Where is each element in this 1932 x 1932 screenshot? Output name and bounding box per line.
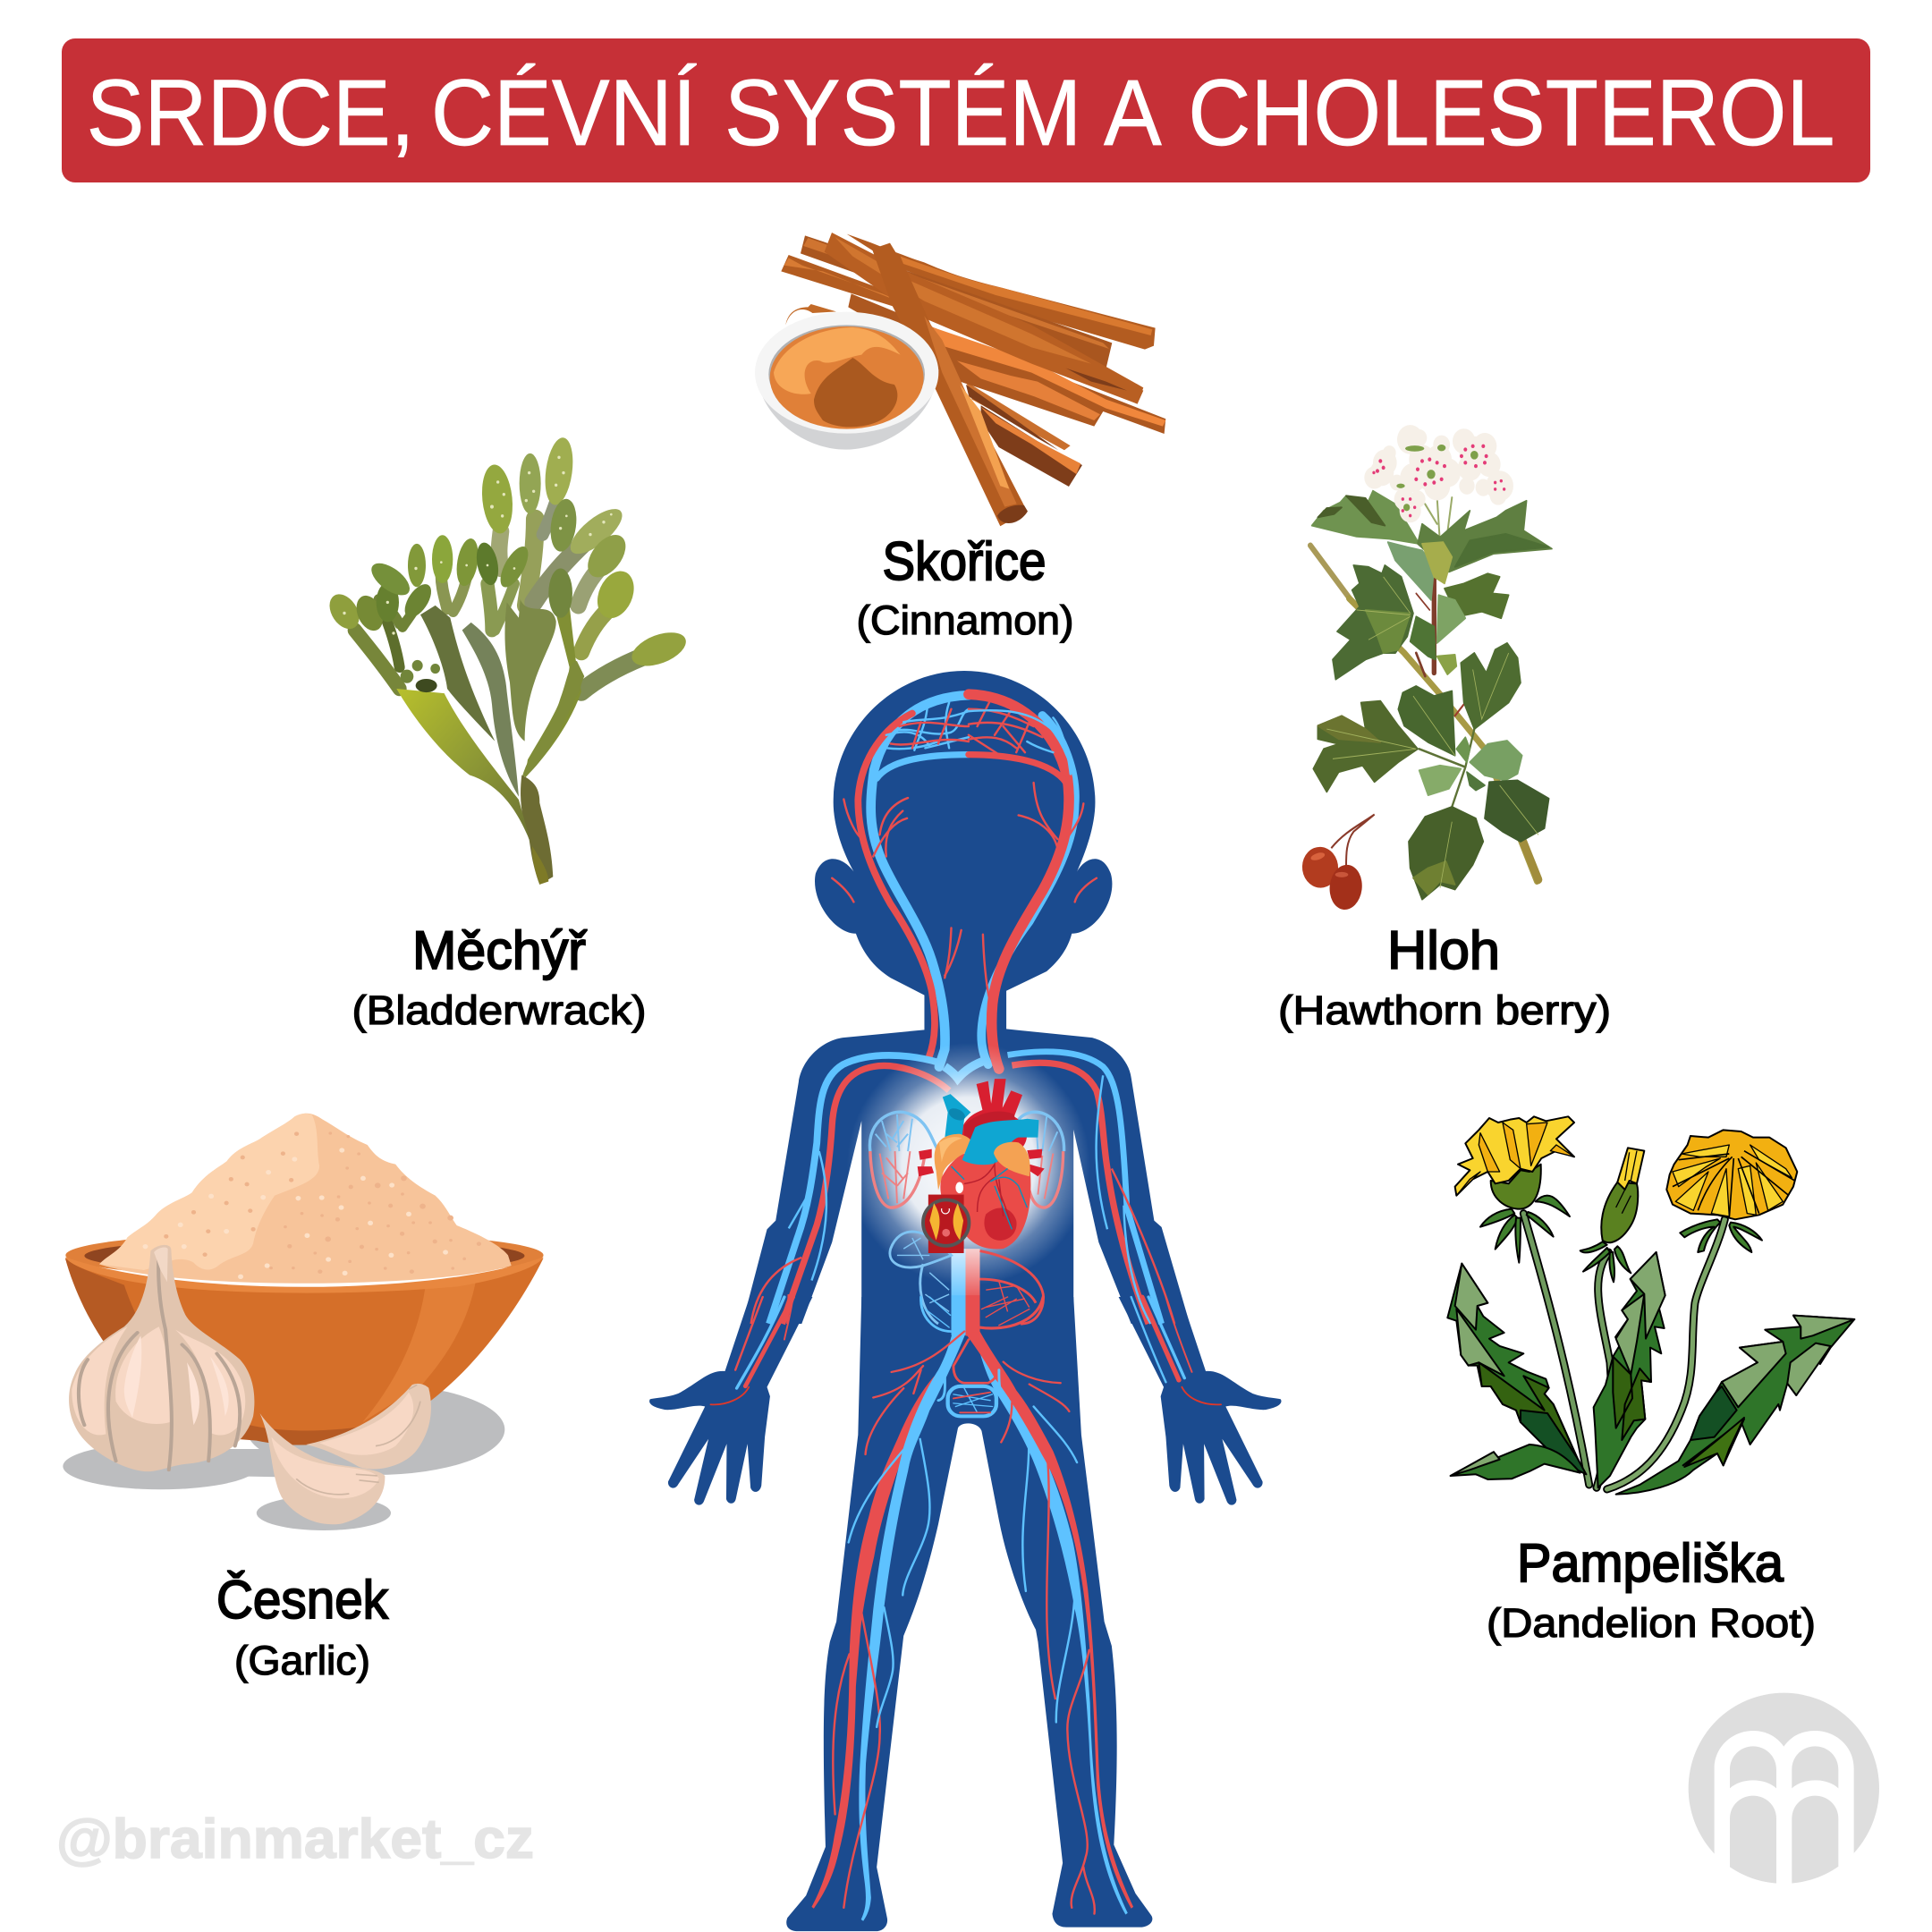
label: dandelion: Pampeliška xyxy=(1517,1533,1784,1593)
glow behind heart xyxy=(847,1043,1090,1285)
label: dandelion: (Dandelion Root) xyxy=(1487,1600,1816,1646)
powder mound xyxy=(65,1114,544,1293)
logo watermark xyxy=(1689,1693,1879,1887)
title banner: SRDCE, xyxy=(87,61,415,165)
digestive lower xyxy=(921,1297,1043,1332)
digestive organs xyxy=(890,1232,1043,1324)
title banner: SYSTÉM xyxy=(724,61,1081,165)
title banner: CHOLESTEROL xyxy=(1188,61,1835,165)
title banner: A xyxy=(1104,61,1162,165)
dandelion bud xyxy=(1601,1148,1644,1242)
cinnamon sticks xyxy=(781,233,1165,526)
hawthorn leaves xyxy=(1312,491,1552,900)
lungs xyxy=(869,1112,1064,1208)
shoulder and arm vessels xyxy=(751,1052,1174,1324)
label: garlic: Česnek xyxy=(216,1570,389,1630)
illustration: bladderwrack xyxy=(324,436,691,885)
label: hawthorn xyxy=(1278,920,1611,1033)
label: bladderwrack: (Bladderwrack) xyxy=(352,987,646,1033)
human body: silhouette xyxy=(649,671,1281,1931)
brain network xyxy=(886,700,1071,774)
illustration: hawthorn xyxy=(1297,425,1552,912)
title banner: CÉVNÍ xyxy=(431,61,697,165)
label: cinnamon: Skořice xyxy=(882,531,1046,591)
dandelion flower: round right xyxy=(1666,1130,1797,1219)
label: bladderwrack: Měchýř xyxy=(412,920,588,980)
illustration: cinnamon xyxy=(755,233,1165,526)
garlic bulb xyxy=(69,1245,254,1471)
central vessels xyxy=(952,1249,980,1325)
cinnamon bowl xyxy=(755,312,938,450)
label: bladderwrack xyxy=(352,920,646,1033)
shadows xyxy=(63,1385,504,1530)
title banner xyxy=(62,38,1870,182)
hawthorn flowers xyxy=(1364,425,1513,522)
dandelion sepals xyxy=(1480,1196,1762,1282)
circulatory system: upper body xyxy=(751,694,1174,1325)
circulatory system: lower body xyxy=(711,1295,1221,1921)
label: cinnamon xyxy=(857,531,1073,643)
label: garlic xyxy=(216,1570,389,1683)
label: hawthorn: Hloh xyxy=(1387,920,1500,980)
bowl xyxy=(65,1232,544,1445)
watermark handle: @brainmarket_cz xyxy=(56,1809,534,1870)
label: cinnamon: (Cinnamon) xyxy=(857,597,1073,643)
forearm and palm vessels xyxy=(711,1297,1221,1404)
label: garlic: (Garlic) xyxy=(234,1638,370,1683)
artery magnifier xyxy=(923,1195,969,1253)
dandelion flower: open left xyxy=(1455,1116,1574,1209)
thin branch vessels xyxy=(833,1332,1095,1914)
hawthorn berries xyxy=(1297,815,1375,912)
main leg veins and arteries xyxy=(811,1332,1133,1921)
abdominal trunk xyxy=(952,1295,980,1336)
label: hawthorn: (Hawthorn berry) xyxy=(1278,987,1611,1033)
heart xyxy=(918,1079,1045,1250)
illustration: dandelion xyxy=(1447,1116,1854,1495)
head and neck vessels xyxy=(832,694,1097,1069)
dandelion stems xyxy=(1523,1214,1724,1489)
garlic cloves xyxy=(259,1384,431,1524)
illustration: garlic powder bowl xyxy=(63,1114,544,1530)
dandelion leaves xyxy=(1447,1252,1854,1495)
label: dandelion xyxy=(1487,1533,1816,1646)
pelvic vessels xyxy=(938,1340,1008,1416)
